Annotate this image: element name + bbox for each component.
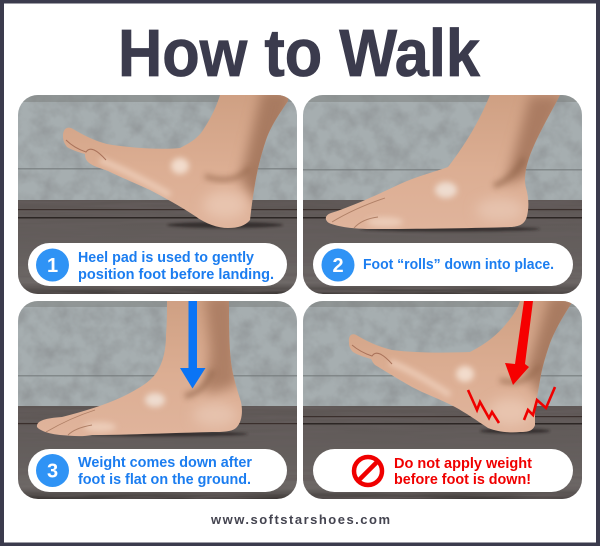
arrow: red down bbox=[505, 301, 533, 385]
caption pill bbox=[313, 449, 573, 492]
panel 2: foot rolls bbox=[303, 95, 582, 294]
caption pill bbox=[28, 449, 287, 492]
step number 1: 1 bbox=[47, 255, 58, 277]
caption text: Foot “rolls” down into place. bbox=[363, 256, 554, 273]
pain mark left bbox=[468, 390, 499, 423]
concrete wall bbox=[18, 95, 297, 201]
foot flat bbox=[320, 95, 565, 231]
wood floor bbox=[303, 200, 582, 294]
title: How to Walk bbox=[118, 16, 481, 91]
caption pill bbox=[313, 243, 573, 286]
concrete wall bbox=[303, 301, 582, 407]
icon: prohibition sign bbox=[354, 457, 382, 485]
step number 1 bbox=[36, 248, 69, 282]
panel 4: do not apply weight bbox=[303, 295, 582, 499]
caption text: foot is flat on the ground. bbox=[78, 471, 251, 488]
foot flat with weight bbox=[35, 295, 245, 437]
concrete wall bbox=[303, 95, 582, 201]
caption text: Weight comes down after bbox=[78, 454, 252, 471]
wood floor bbox=[18, 200, 297, 294]
panel 3: weight comes down bbox=[18, 295, 297, 499]
wood floor bbox=[303, 406, 582, 499]
foot raised on heel bbox=[60, 90, 295, 230]
foot shadow bbox=[360, 226, 540, 232]
pain mark right bbox=[524, 387, 555, 420]
caption text: Heel pad is used to gently bbox=[78, 249, 255, 266]
wood floor bbox=[18, 406, 297, 499]
caption text: Do not apply weight bbox=[394, 455, 532, 472]
foot shadow bbox=[167, 222, 283, 228]
foot on heel bbox=[348, 301, 572, 432]
caption text: before foot is down! bbox=[394, 471, 531, 488]
panel 1: heel pad bbox=[18, 90, 297, 294]
step number 3: 3 bbox=[47, 460, 58, 482]
footer url: www.softstarshoes.com bbox=[210, 512, 390, 527]
foot shadow bbox=[92, 432, 248, 436]
caption pill bbox=[28, 243, 287, 286]
caption text: position foot before landing. bbox=[78, 266, 274, 283]
step number 2 bbox=[322, 248, 354, 282]
step number 2: 2 bbox=[332, 255, 344, 277]
step number 3 bbox=[36, 454, 69, 487]
arrow: blue down bbox=[180, 301, 206, 388]
foot shadow bbox=[480, 428, 550, 434]
concrete wall bbox=[18, 301, 297, 407]
